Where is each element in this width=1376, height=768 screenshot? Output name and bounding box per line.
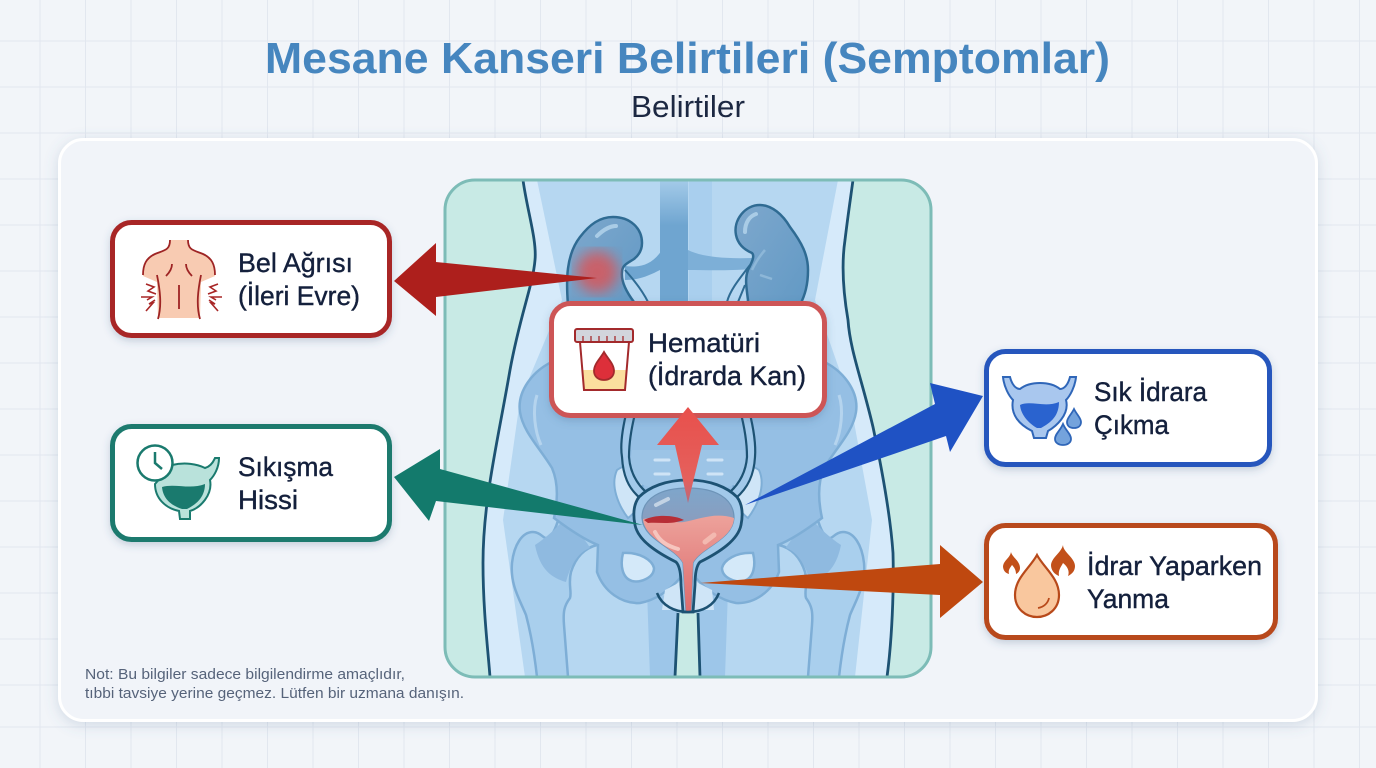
body silhouette: [483, 180, 893, 677]
icon: urine cup with blood drop: [575, 329, 633, 390]
label: frequent urination: [1094, 376, 1208, 440]
icon: back with pain marks: [141, 240, 222, 319]
label: back pain: Bel Ağrısı: [238, 248, 353, 278]
label: back pain: (İleri Evre): [238, 280, 360, 311]
label: frequent urination: Çıkma: [1094, 410, 1170, 440]
spine and vessels: [625, 180, 752, 310]
disclaimer note: [85, 667, 464, 702]
label: frequent urination: Sık İdrara: [1094, 376, 1208, 407]
arrow: urethra to burning: [700, 545, 983, 618]
card: urgency: [112, 426, 390, 540]
icon: bladder with clock: [138, 446, 219, 519]
card: frequent urination: [986, 352, 1270, 464]
label: urgency: Sıkışma: [238, 452, 334, 482]
label: hematuria: [648, 328, 806, 391]
arrow: bladder to urgency: [394, 449, 643, 525]
disclaimer note: Not: Bu bilgiler sadece bilgilendirme amaçlıdır,: [85, 667, 405, 683]
label: hematuria: (İdrarda Kan): [648, 360, 806, 391]
card: hematuria: [552, 304, 824, 416]
right kidney: [726, 204, 810, 301]
arrow: bladder up to hematuria: [657, 407, 719, 503]
bladder: [634, 480, 742, 612]
ureters: [621, 410, 755, 498]
icon: drop with flames: [1003, 545, 1075, 617]
disclaimer note: tıbbi tavsiye yerine geçmez. Lütfen bir uzmana danışın.: [85, 686, 464, 702]
label: back pain: [238, 248, 360, 311]
card: back pain: [112, 222, 390, 336]
label: burning: Yanma: [1087, 584, 1170, 614]
left kidney: [566, 216, 648, 302]
arrow: kidney to back pain: [394, 243, 597, 316]
pain glow on kidney: [576, 251, 618, 293]
arrow: bladder to frequent urination: [745, 383, 983, 505]
anatomy illustration panel: [445, 180, 931, 677]
subtitle: Belirtiler: [631, 89, 745, 124]
label: hematuria: Hematüri: [648, 328, 760, 358]
card: burning: [986, 526, 1276, 638]
pelvic bones: [512, 360, 864, 677]
label: urgency: Hissi: [238, 485, 298, 515]
label: burning: İdrar Yaparken: [1087, 550, 1262, 581]
main panel: [60, 140, 1316, 720]
label: urgency: [238, 452, 334, 515]
icon: bladder with droplets: [1003, 377, 1081, 445]
title: Mesane Kanseri Belirtileri (Semptomlar): [265, 34, 1110, 83]
body outline strokes: [483, 180, 893, 677]
label: burning: [1087, 550, 1262, 614]
